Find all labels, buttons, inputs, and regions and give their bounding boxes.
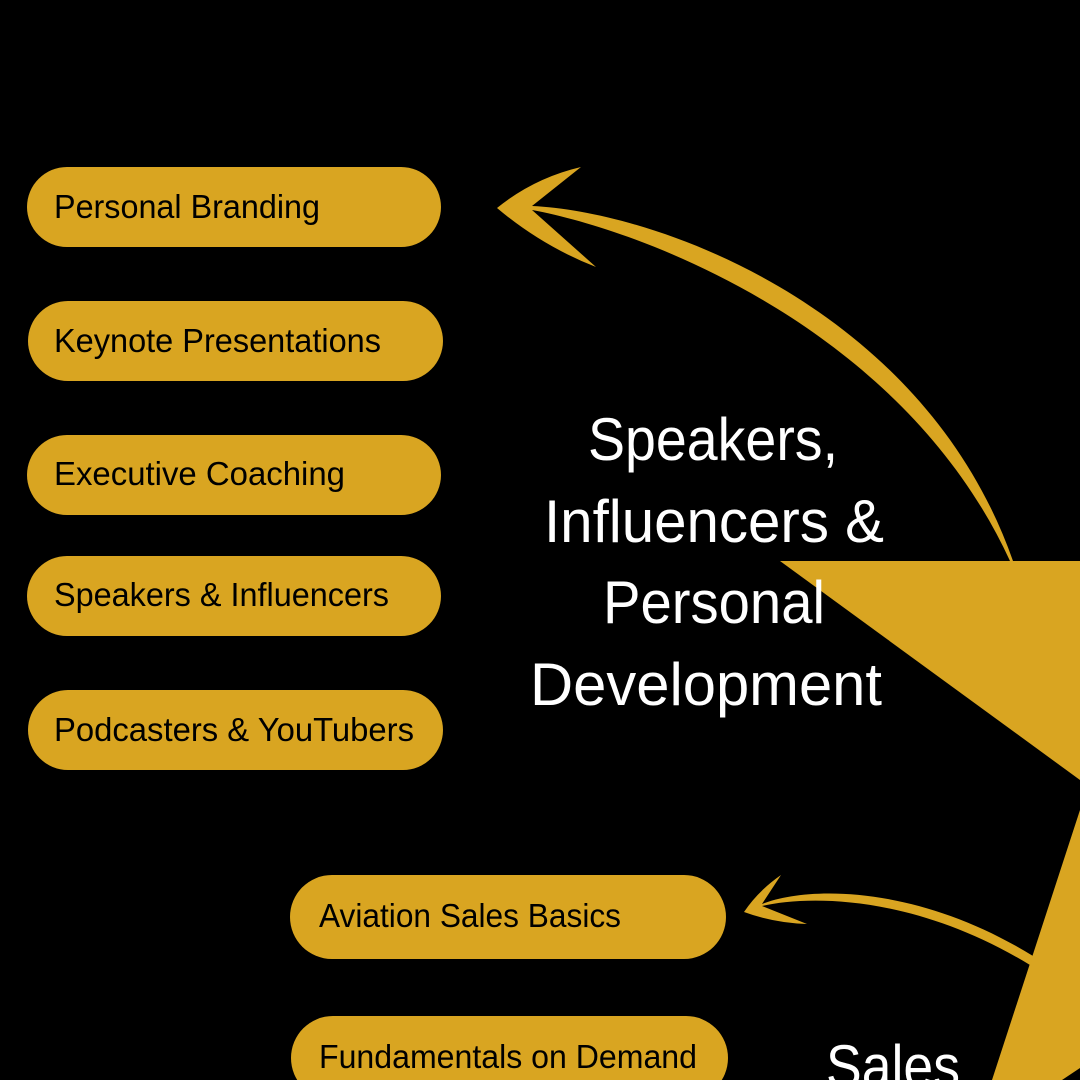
pill: Aviation Sales Basics	[290, 875, 726, 959]
pill: Fundamentals on Demand: Fundamentals on Demand	[319, 1038, 697, 1075]
pill: Podcasters & YouTubers	[28, 690, 443, 770]
pill: Speakers & Influencers: Speakers & Influencers	[54, 576, 389, 613]
arrow: to Aviation Sales Basics	[744, 875, 1033, 965]
pill: Aviation Sales Basics: Aviation Sales Basics	[319, 897, 621, 934]
pill: Personal Branding: Personal Branding	[54, 188, 320, 225]
heading: Speakers, Influencers & Personal Development: Development	[530, 651, 882, 718]
pill: Podcasters & YouTubers: Podcasters & YouTubers	[54, 711, 414, 748]
pill: Keynote Presentations	[28, 301, 443, 381]
pill: Speakers & Influencers	[27, 556, 441, 636]
heading: Speakers, Influencers & Personal Development	[530, 406, 884, 718]
pill: Executive Coaching: Executive Coaching	[54, 455, 345, 492]
pill: Executive Coaching	[27, 435, 441, 515]
pill: Personal Branding	[27, 167, 441, 247]
pill: Keynote Presentations: Keynote Presentations	[54, 322, 381, 359]
pill: Fundamentals on Demand	[291, 1016, 728, 1080]
heading: Speakers, Influencers & Personal Development: Speakers,	[588, 406, 838, 473]
shape: lower gold wedge	[992, 810, 1080, 1080]
arrow: to Personal Branding	[497, 167, 1013, 561]
heading: Speakers, Influencers & Personal Development: Influencers &	[544, 488, 884, 555]
heading: Speakers, Influencers & Personal Development: Personal	[603, 569, 825, 636]
shape: large gold triangle	[780, 561, 1080, 780]
